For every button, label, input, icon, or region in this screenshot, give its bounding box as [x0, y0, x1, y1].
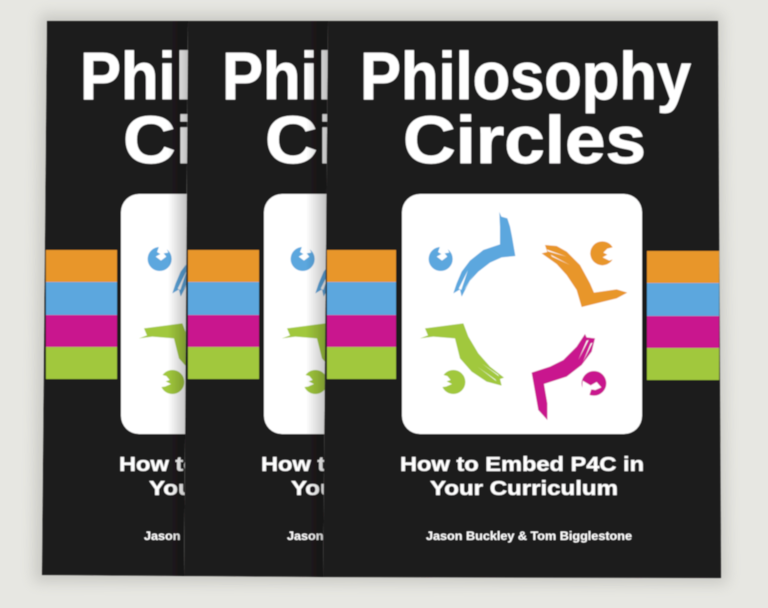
subtitle: back copy: Your Curriculum	[149, 478, 337, 500]
title: back copy: Circles	[123, 103, 366, 178]
book cover: middle copy	[183, 20, 329, 578]
subtitle: front: How to Embed P4C in	[400, 454, 644, 476]
title: middle copy: Circles	[265, 103, 508, 178]
colour stripes: back copy	[46, 250, 117, 379]
subtitle: back copy: How to Embed P4C in	[119, 454, 363, 476]
icon: four brush-stroke figures in a circle	[420, 212, 627, 420]
title: front	[360, 39, 691, 178]
title: back copy: Philosophy	[80, 39, 411, 114]
subtitle: middle copy: Your Curriculum	[291, 478, 479, 500]
title: front: Philosophy	[360, 39, 691, 114]
subtitle: back copy	[119, 456, 186, 496]
white logo card: front	[402, 194, 642, 434]
subtitle: middle copy: How to Embed P4C in	[261, 454, 505, 476]
author: back copy: Jason Buckley & Tom Bigglestone	[144, 529, 350, 543]
colour stripes: front right	[647, 251, 719, 380]
subtitle: middle copy	[261, 456, 325, 496]
author: front: Jason Buckley & Tom Bigglestone	[426, 529, 632, 543]
white logo card: middle copy	[263, 193, 328, 435]
author: middle copy: Jason Buckley & Tom Bigglestone	[287, 529, 493, 543]
title: front: Circles	[403, 103, 646, 178]
book cover: front copy	[323, 21, 721, 578]
subtitle: front: Your Curriculum	[430, 478, 618, 500]
title: middle copy: Philosophy	[222, 39, 553, 114]
colour stripes: front left	[327, 250, 396, 379]
colour stripes: middle copy	[188, 250, 259, 379]
title: middle copy	[224, 49, 328, 165]
subtitle: front	[400, 454, 644, 500]
white logo card: back copy	[120, 193, 188, 435]
book cover: back copy	[41, 20, 189, 577]
title: back copy	[82, 49, 189, 165]
